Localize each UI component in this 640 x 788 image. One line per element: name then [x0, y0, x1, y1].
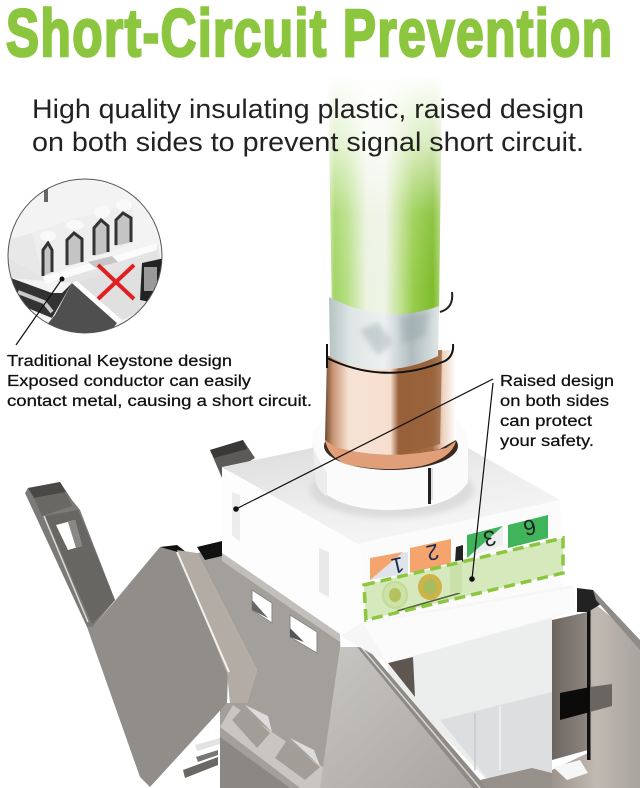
tooth tips [40, 204, 132, 241]
rear shell panel [197, 550, 345, 788]
collar shadow [310, 462, 474, 518]
foil rings [327, 344, 453, 373]
centre metal plate [320, 647, 473, 788]
left wing fold [177, 550, 257, 703]
red cross [98, 265, 134, 299]
rear latch [210, 440, 255, 478]
front ledge [340, 585, 575, 663]
leader lines for raised design [233, 379, 493, 582]
shell slots [252, 590, 272, 623]
subtitle: on both sides to prevent signal short circuit. [32, 127, 584, 157]
white keystone housing [210, 440, 575, 663]
left wing tab [25, 482, 115, 627]
wire colour labels: 1 [389, 552, 406, 579]
text: raised design: your safety. [500, 433, 594, 450]
front face [360, 500, 563, 625]
foil shield [329, 297, 439, 369]
wire colour labels: 2 [424, 539, 441, 566]
text: traditional keystone design: Traditional Keystone design [7, 353, 232, 370]
lower white insert [388, 618, 552, 780]
text: raised design: can protect [500, 413, 593, 430]
cable jacket [322, 74, 448, 315]
subtitle [32, 94, 584, 157]
cable end [310, 292, 474, 518]
dark wedge [48, 283, 117, 332]
contact holes [383, 560, 462, 611]
left face [222, 467, 365, 634]
wire colour labels: 6 [521, 514, 538, 541]
text: traditional keystone design: Exposed conductor can easily [7, 373, 251, 390]
text: raised design: on both sides [500, 393, 609, 410]
text: traditional keystone design [7, 353, 312, 410]
connector wall [32, 203, 133, 277]
subtitle: High quality insulating plastic, raised design [32, 94, 584, 124]
text: traditional keystone design: contact metal, causing a short circuit. [7, 393, 312, 410]
right bracket [552, 612, 588, 760]
bottom crimp tabs [220, 737, 290, 788]
collar [312, 420, 468, 510]
raised design highlight [364, 538, 563, 620]
text: raised design: Raised design [500, 373, 614, 390]
callout leader [16, 279, 62, 345]
left wing plate [87, 547, 228, 787]
top face [222, 448, 560, 545]
wire colour labels [370, 514, 548, 580]
copper braid [325, 350, 456, 455]
text: raised design [500, 373, 614, 450]
connector teeth [42, 213, 132, 276]
wire colour labels: 3 [481, 525, 498, 552]
callout: traditional design inset [8, 179, 165, 345]
side slots [232, 492, 329, 597]
connector lower metal shell [25, 482, 640, 788]
